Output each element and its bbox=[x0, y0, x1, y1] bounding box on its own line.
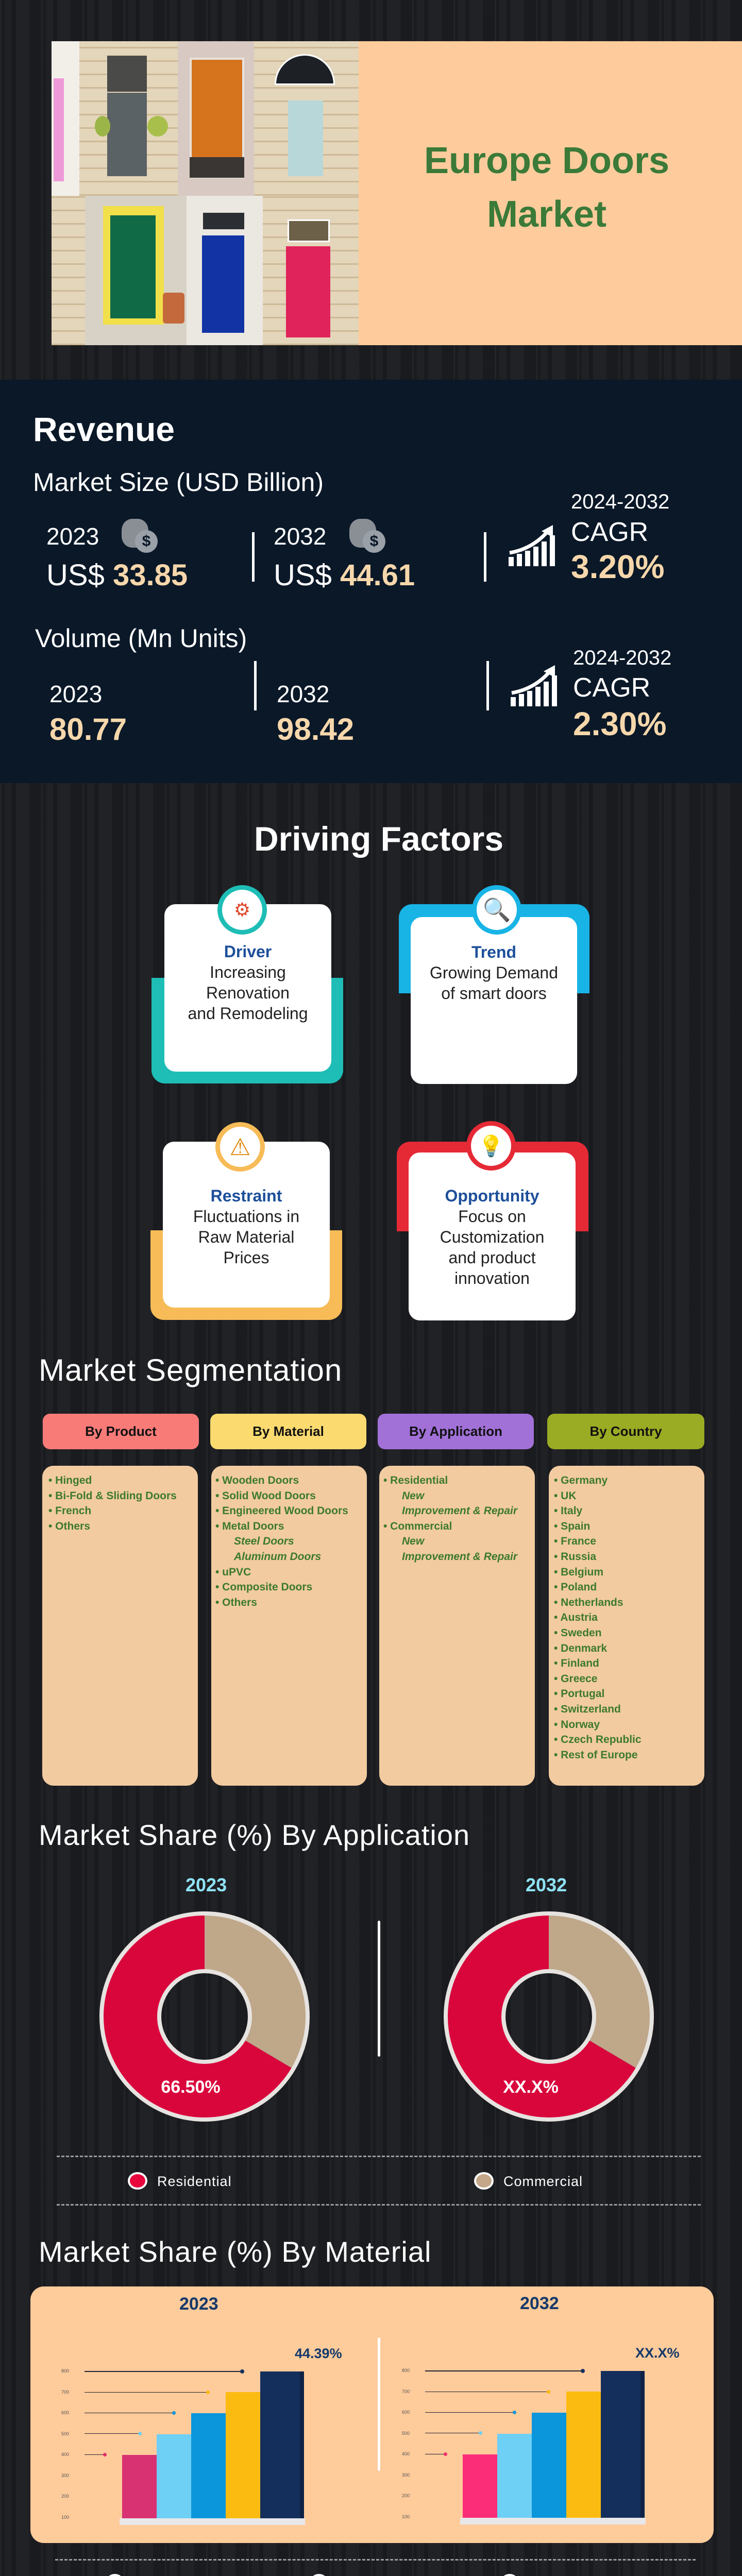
icon: driver gears: ⚙ bbox=[234, 899, 250, 920]
icon: coins: $ bbox=[370, 533, 378, 550]
chart: material bars 2023: 400 bbox=[61, 2452, 69, 2457]
card: trend bbox=[399, 885, 589, 1084]
panel: by product: • Hinged bbox=[48, 1475, 92, 1486]
subheading: market size: Market Size (USD Billion) bbox=[33, 468, 324, 497]
heading: market share by application: Market Share (%) By Application bbox=[39, 1819, 470, 1851]
card: restraint: Prices bbox=[224, 1248, 269, 1267]
segmentation headers bbox=[43, 1414, 704, 1449]
panel: by country: • Spain bbox=[554, 1520, 590, 1532]
panel: by country: • Greece bbox=[554, 1673, 597, 1685]
panel: by country: • Norway bbox=[554, 1719, 600, 1730]
chart: material bars 2023: 600 bbox=[61, 2410, 69, 2415]
stat: 2032 value: 2032 bbox=[274, 523, 326, 550]
panel: by country: • Switzerland bbox=[554, 1703, 621, 1715]
stat: volume 2023: 2023 bbox=[49, 681, 102, 707]
chart: application donut 2032 bbox=[444, 1911, 654, 2122]
chart: material bars 2032 bbox=[402, 2345, 680, 2524]
card: driver: Driver bbox=[224, 942, 272, 961]
chart: application donut 2023 bbox=[99, 1911, 310, 2122]
stat: 2032 value: US$ 44.61 bbox=[274, 558, 415, 592]
panel: material bar charts bbox=[30, 2286, 714, 2543]
panel: by material: • Metal Doors bbox=[215, 1520, 284, 1532]
title bbox=[424, 140, 669, 235]
panel: revenue bbox=[0, 380, 742, 783]
stat: 2023 value: 2023 bbox=[46, 523, 99, 550]
stat: revenue CAGR: 3.20% bbox=[571, 548, 664, 585]
chart: material bars 2032: 400 bbox=[402, 2451, 410, 2456]
card: opportunity: and product bbox=[448, 1248, 536, 1267]
panel: by material bbox=[211, 1466, 367, 1786]
panel: by product bbox=[42, 1466, 198, 1786]
icon: growth chart bbox=[511, 665, 557, 706]
panel: by application: Improvement & Repair bbox=[402, 1551, 517, 1563]
chart: material bars 2023: 100 bbox=[61, 2515, 69, 2520]
panel: by application: New bbox=[402, 1535, 424, 1547]
chart: material bars 2023: 300 bbox=[61, 2473, 69, 2478]
panel: by country: • Finland bbox=[554, 1657, 599, 1669]
legend: material bbox=[109, 2574, 633, 2576]
subheading: volume: Volume (Mn Units) bbox=[35, 624, 247, 653]
chart: application donut 2032: XX.X% bbox=[503, 2077, 559, 2097]
panel: by application bbox=[379, 1466, 535, 1786]
panel: by material: • Solid Wood Doors bbox=[215, 1490, 316, 1502]
panel: by application: • Residential bbox=[383, 1475, 448, 1486]
chart: material bars 2023: 500 bbox=[61, 2431, 69, 2436]
stat: volume CAGR: 2024-2032 bbox=[573, 647, 671, 669]
panel: by application: New bbox=[402, 1490, 424, 1502]
stat: 2023 value: US$ 33.85 bbox=[46, 558, 188, 592]
chart: material bars 2032: 600 bbox=[402, 2410, 410, 2415]
panel: by country: • Germany bbox=[554, 1475, 608, 1486]
stat: volume 2032: 98.42 bbox=[277, 712, 354, 747]
stat: volume CAGR bbox=[573, 647, 671, 742]
stat: volume CAGR: 2.30% bbox=[573, 705, 666, 742]
stat: 2032 value bbox=[274, 523, 415, 592]
panel: by country: • Russia bbox=[554, 1551, 596, 1563]
card: driver bbox=[151, 885, 343, 1083]
chart: material bars 2032: 300 bbox=[402, 2472, 410, 2478]
title: Europe Doors bbox=[424, 140, 669, 181]
chart: material bars 2032: 500 bbox=[402, 2431, 410, 2436]
chart: material bars 2032: 100 bbox=[402, 2514, 410, 2519]
panel: by country: • UK bbox=[554, 1490, 577, 1502]
icon: warning bbox=[215, 1122, 265, 1172]
icon: driver gears bbox=[217, 885, 267, 935]
icon: trend magnifier bbox=[472, 885, 521, 935]
legend: application bbox=[128, 2172, 583, 2190]
panel: by country: • Belgium bbox=[554, 1566, 603, 1578]
icon: growth chart bbox=[509, 525, 555, 566]
panel: by application: • Commercial bbox=[383, 1520, 452, 1532]
panel: by country: • Rest of Europe bbox=[554, 1749, 638, 1761]
card: opportunity: innovation bbox=[454, 1269, 530, 1287]
label: 2023: 2023 bbox=[179, 2294, 218, 2314]
card: driver: and Remodeling bbox=[188, 1004, 308, 1023]
chart: material bars 2023: 800 bbox=[61, 2368, 69, 2374]
heading: market segmentation: Market Segmentation bbox=[39, 1353, 342, 1387]
icon: warning: ⚠ bbox=[229, 1133, 251, 1160]
label: 2032: 2032 bbox=[526, 1874, 567, 1895]
panel: by country: • Sweden bbox=[554, 1627, 602, 1639]
stat: volume 2032: 2032 bbox=[277, 681, 329, 707]
card: restraint: Restraint bbox=[211, 1187, 282, 1205]
panel: by country: • Netherlands bbox=[554, 1597, 623, 1608]
divider bbox=[378, 2337, 380, 2471]
card: trend: Trend bbox=[471, 943, 516, 961]
divider bbox=[378, 1921, 380, 2057]
segmentation headers: By Country bbox=[589, 1423, 662, 1439]
panel: by country: • Portugal bbox=[554, 1688, 604, 1700]
chart: material bars 2023 bbox=[61, 2346, 342, 2525]
card: trend: Growing Demand bbox=[430, 963, 558, 982]
panel: by product: • Bi-Fold & Sliding Doors bbox=[48, 1490, 177, 1502]
panel: by country: • Poland bbox=[554, 1581, 597, 1593]
panel: by material: • Wooden Doors bbox=[215, 1475, 299, 1486]
card: driver: Renovation bbox=[206, 984, 290, 1002]
panel: by country: • Denmark bbox=[554, 1642, 607, 1654]
segmentation headers: By Material bbox=[252, 1423, 324, 1439]
panel: by material: • Others bbox=[215, 1597, 257, 1608]
card: opportunity bbox=[397, 1121, 588, 1320]
icon: trend magnifier: 🔍 bbox=[483, 897, 511, 923]
card: opportunity: Customization bbox=[440, 1228, 544, 1246]
chart: material bars 2023: 700 bbox=[61, 2389, 69, 2395]
panel: by country bbox=[549, 1466, 704, 1786]
hero: title panel bbox=[359, 41, 742, 345]
card: driver: Increasing bbox=[210, 963, 286, 981]
icon: idea hand: 💡 bbox=[478, 1134, 504, 1157]
panel: by country: • Italy bbox=[554, 1505, 582, 1517]
chart: material bars 2032: 700 bbox=[402, 2389, 410, 2394]
icon: coins: $ bbox=[142, 533, 150, 550]
stat: revenue CAGR bbox=[571, 490, 669, 585]
panel: by product: • Others bbox=[48, 1520, 90, 1532]
card: restraint: Fluctuations in bbox=[193, 1207, 299, 1226]
card: opportunity: Opportunity bbox=[445, 1187, 539, 1205]
card: restraint: Raw Material bbox=[198, 1228, 294, 1246]
panel: by country: • Austria bbox=[554, 1612, 598, 1623]
title: Market bbox=[487, 194, 606, 235]
stat: volume 2032 bbox=[277, 681, 354, 747]
panel: by material: Steel Doors bbox=[234, 1535, 294, 1547]
panel: by country: • France bbox=[554, 1535, 596, 1547]
stat: 2023 value bbox=[46, 523, 188, 592]
segmentation headers: By Application bbox=[409, 1423, 502, 1439]
chart: material bars 2032: XX.X% bbox=[635, 2345, 680, 2361]
stat: volume 2023: 80.77 bbox=[49, 712, 127, 747]
icon: coins bbox=[122, 519, 158, 553]
icon: coins bbox=[349, 519, 385, 553]
stat: volume 2023 bbox=[49, 681, 127, 747]
panel: by material: Aluminum Doors bbox=[234, 1551, 321, 1563]
panel: by country: • Czech Republic bbox=[554, 1734, 642, 1745]
chart: material bars 2032: 800 bbox=[402, 2368, 410, 2373]
legend: application: Commercial bbox=[503, 2174, 583, 2189]
panel: by product: • French bbox=[48, 1505, 91, 1517]
panel: by material: • uPVC bbox=[215, 1566, 251, 1578]
hero: door photo collage bbox=[52, 41, 359, 345]
card: restraint bbox=[150, 1122, 342, 1320]
chart: material bars 2032: 200 bbox=[402, 2493, 410, 2498]
panel: by application: Improvement & Repair bbox=[402, 1505, 517, 1517]
card: trend: of smart doors bbox=[441, 984, 547, 1003]
card: opportunity: Focus on bbox=[458, 1207, 526, 1226]
heading: revenue: Revenue bbox=[33, 410, 175, 448]
label: 2032: 2032 bbox=[520, 2294, 559, 2313]
stat: revenue CAGR: 2024-2032 bbox=[571, 490, 669, 513]
heading: driving factors: Driving Factors bbox=[254, 820, 503, 858]
divider bbox=[252, 532, 255, 582]
panel: by material: • Composite Doors bbox=[215, 1581, 312, 1593]
stat: revenue CAGR: CAGR bbox=[571, 517, 648, 547]
stat: volume CAGR: CAGR bbox=[573, 673, 650, 703]
chart: material bars 2023: 200 bbox=[61, 2494, 69, 2499]
panel: by material: • Engineered Wood Doors bbox=[215, 1505, 348, 1517]
label: 2023: 2023 bbox=[185, 1874, 227, 1895]
legend: application: Residential bbox=[157, 2174, 232, 2189]
chart: application donut 2023: 66.50% bbox=[161, 2077, 221, 2097]
heading: market share by material: Market Share (%) By Material bbox=[39, 2235, 431, 2268]
segmentation headers: By Product bbox=[85, 1423, 157, 1439]
icon: idea hand bbox=[466, 1121, 516, 1171]
chart: material bars 2023: 44.39% bbox=[295, 2346, 342, 2361]
